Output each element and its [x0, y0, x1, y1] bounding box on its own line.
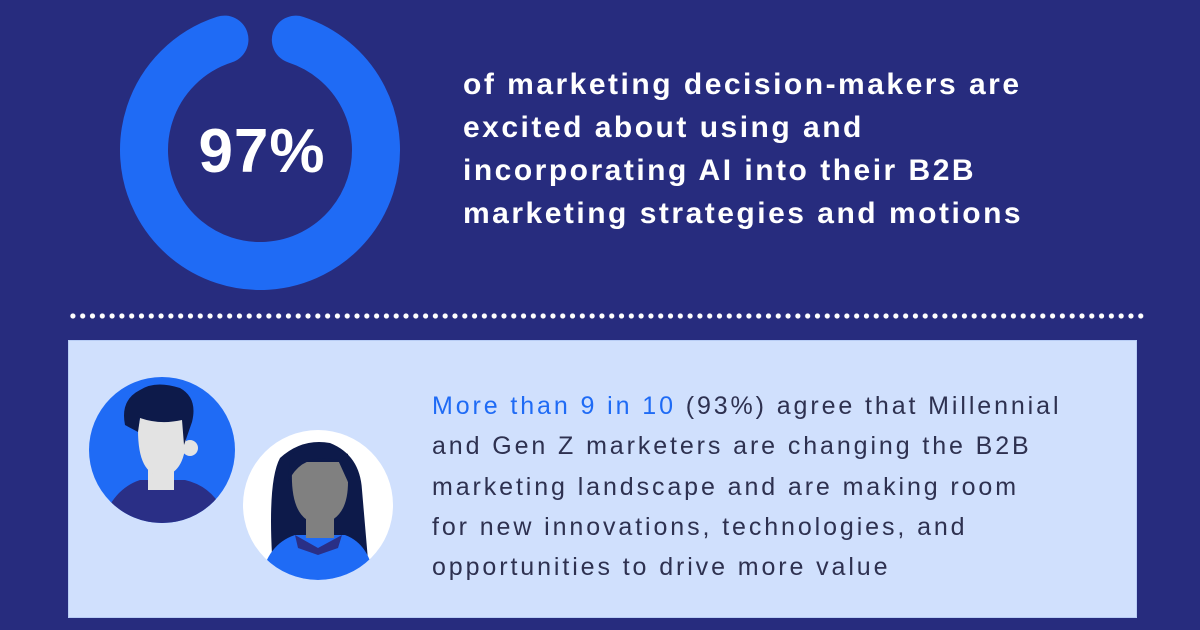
stat text: 93%: opportunities to drive more value	[432, 553, 890, 581]
stat text: 97%: excited about using and	[463, 111, 864, 144]
stat text: 97%: marketing strategies and motions	[463, 197, 1023, 230]
donut chart: 97%	[120, 16, 400, 290]
stat text: 97%: of marketing decision-makers are	[463, 68, 1022, 101]
stat text: 97%: incorporating AI into their B2B	[463, 154, 976, 187]
stat text: 93%: and Gen Z marketers are changing the B2B	[432, 432, 1032, 460]
donut label: 97%	[198, 117, 326, 186]
stat text: 97%	[463, 68, 1023, 230]
icon: avatars	[89, 377, 393, 580]
icon: woman avatar	[243, 430, 393, 585]
panel: generational stat	[68, 340, 1137, 618]
stat text: 93%: for new innovations, technologies, and	[432, 513, 967, 541]
icon: man avatar	[89, 377, 235, 530]
stat text: 93%: marketing landscape and are making room	[432, 473, 1019, 501]
stat text: 93%: More than 9 in 10 (93%) agree that Millennial	[432, 392, 1061, 420]
stat text: 93%	[432, 392, 1061, 581]
